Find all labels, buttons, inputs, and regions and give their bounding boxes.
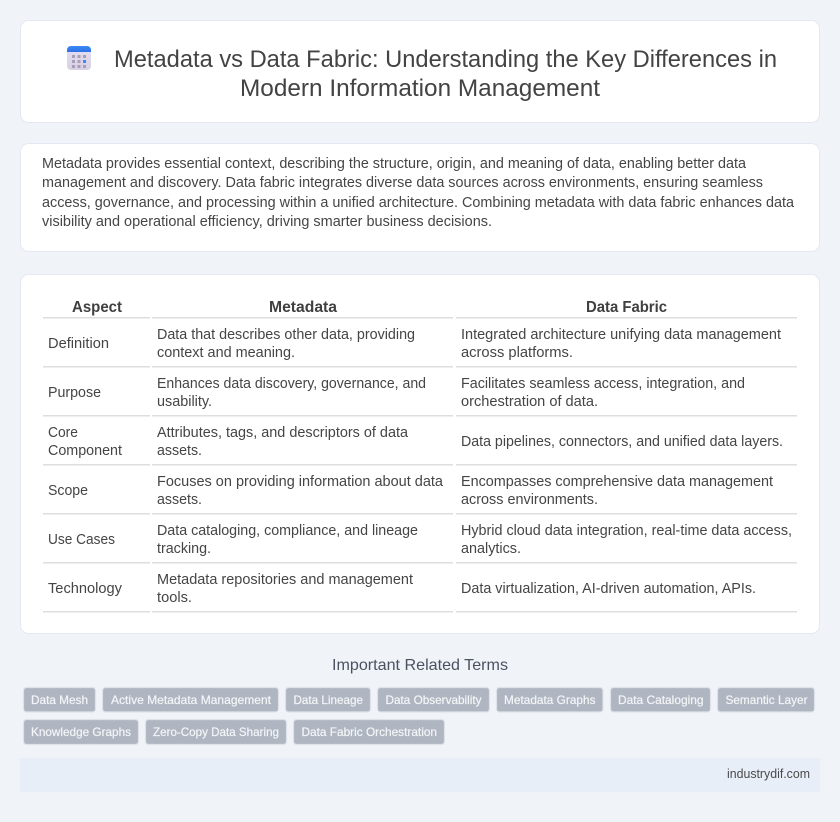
- text block: introduction paragraph: access, governance, and processing within a unified architecture. Combining metadata with data fabric enhances data: [42, 195, 794, 211]
- row: scope: Focuses on providing information about data: [157, 474, 443, 490]
- row: use cases: tracking.: [157, 541, 211, 557]
- row: scope: Scope: [48, 483, 88, 499]
- row: technology: [43, 572, 797, 612]
- row: technology: Technology: [48, 581, 123, 597]
- table header: [43, 299, 797, 318]
- title: Modern Information Management: [240, 75, 600, 102]
- footer: industrydif.com: [727, 767, 810, 781]
- tag: data observability: [378, 688, 490, 712]
- tag: zero-copy data sharing: Zero-Copy Data Sharing: [153, 725, 279, 739]
- tag: data lineage: [286, 688, 370, 712]
- row: use cases: Use Cases: [48, 532, 115, 548]
- title: Metadata vs Data Fabric: Understanding the Key Differences in: [114, 46, 777, 73]
- row: purpose: Purpose: [48, 385, 101, 401]
- row: scope: [43, 474, 797, 514]
- row: scope: Encompasses comprehensive data management: [461, 474, 773, 490]
- row: purpose: usability.: [157, 394, 212, 410]
- tag: metadata graphs: Metadata Graphs: [504, 693, 596, 707]
- tag: semantic layer: [718, 688, 814, 712]
- table header: Metadata: [269, 299, 337, 316]
- row: definition: context and meaning.: [157, 345, 295, 361]
- row: use cases: Hybrid cloud data integration, real-time data access,: [461, 523, 792, 539]
- tag: semantic layer: Semantic Layer: [726, 693, 808, 707]
- heading: important related terms: Important Related Terms: [332, 657, 508, 674]
- row: definition: Data that describes other data, providing: [157, 327, 415, 343]
- row: core component: [43, 425, 797, 466]
- tag: data cataloging: Data Cataloging: [618, 693, 704, 707]
- row: purpose: Enhances data discovery, governance, and: [157, 376, 426, 392]
- row: technology: tools.: [157, 590, 192, 606]
- row: core component: Core: [48, 425, 78, 441]
- footer: [20, 758, 820, 792]
- row: purpose: orchestration of data.: [461, 394, 598, 410]
- row: core component: assets.: [157, 443, 202, 459]
- row: core component: Data pipelines, connectors, and unified data layers.: [461, 434, 783, 450]
- tag: data fabric orchestration: [294, 720, 444, 744]
- tag: data fabric orchestration: Data Fabric Orchestration: [302, 725, 437, 739]
- row: purpose: Facilitates seamless access, integration, and: [461, 376, 745, 392]
- tag: data mesh: [24, 688, 96, 712]
- title: [114, 46, 777, 102]
- row: definition: Definition: [48, 336, 109, 352]
- row: core component: Attributes, tags, and descriptors of data: [157, 425, 408, 441]
- row: core component: Component: [48, 443, 122, 459]
- panel: header: [20, 20, 820, 122]
- row: technology: Metadata repositories and management: [157, 572, 413, 588]
- row: use cases: [43, 523, 797, 564]
- row: use cases: analytics.: [461, 541, 521, 557]
- tag: active metadata management: [102, 688, 278, 712]
- row: scope: assets.: [157, 492, 202, 508]
- text block: introduction paragraph: [42, 156, 794, 230]
- row: technology: Data virtualization, AI-driven automation, APIs.: [461, 581, 756, 597]
- tag: metadata graphs: [496, 688, 603, 712]
- table header: Aspect: [72, 299, 123, 316]
- tag: data observability: Data Observability: [386, 693, 482, 707]
- tag: knowledge graphs: Knowledge Graphs: [31, 725, 131, 739]
- tag: data cataloging: [610, 688, 710, 712]
- tag: zero-copy data sharing: [146, 720, 286, 744]
- panel: introduction: [20, 144, 820, 252]
- related term tags: [24, 688, 814, 744]
- tag: active metadata management: Active Metadata Management: [111, 693, 272, 707]
- text block: introduction paragraph: Metadata provides essential context, describing the structure, origin, and meaning of data, enabling better data: [42, 156, 746, 172]
- row: definition: [43, 327, 797, 368]
- tag: knowledge graphs: [24, 720, 138, 744]
- text block: introduction paragraph: visibility and operational efficiency, driving smarter business decisions.: [42, 214, 492, 230]
- row: definition: across platforms.: [461, 345, 573, 361]
- icon: calendar: [67, 46, 91, 70]
- panel: comparison table: [20, 274, 820, 634]
- row: purpose: [43, 376, 797, 416]
- table header: Data Fabric: [586, 299, 667, 316]
- tag: data mesh: Data Mesh: [31, 693, 88, 707]
- row: use cases: Data cataloging, compliance, and lineage: [157, 523, 418, 539]
- row: scope: across environments.: [461, 492, 598, 508]
- text block: introduction paragraph: management and discovery. Data fabric integrates diverse data sources across environments, ensuring seamless: [42, 175, 763, 191]
- row: definition: Integrated architecture unifying data management: [461, 327, 781, 343]
- tag: data lineage: Data Lineage: [294, 693, 363, 707]
